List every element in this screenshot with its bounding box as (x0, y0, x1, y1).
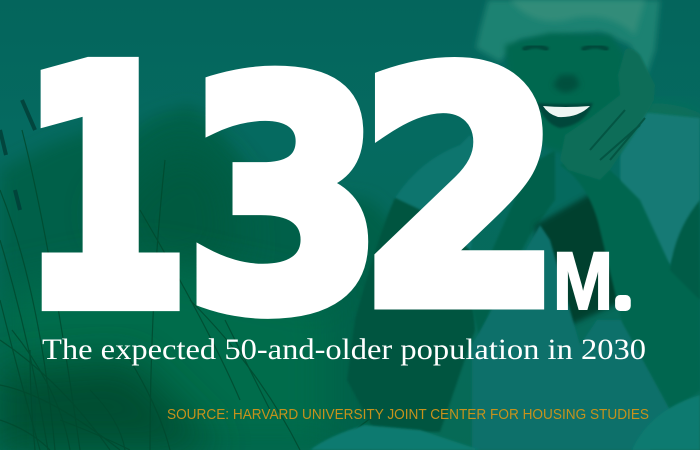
letter M: M (553, 236, 613, 327)
mouth (537, 103, 593, 128)
chest (535, 180, 625, 330)
teeth (543, 106, 590, 117)
right arm (560, 150, 700, 412)
big number 132 (19, 2, 563, 382)
digit 3: 3 (184, 16, 384, 382)
digit 1: 1 (19, 2, 190, 381)
face (505, 33, 625, 155)
left shoulder and sleeve (395, 135, 480, 260)
eyes (523, 46, 608, 50)
shirt centre (472, 225, 670, 450)
source line: SOURCE: HARVARD UNIVERSITY JOINT CENTER FOR HOUSING STUDIES (167, 406, 649, 423)
hair (476, 0, 660, 80)
upper left arm (347, 198, 475, 432)
shirt right (620, 112, 700, 265)
unit M. (553, 236, 629, 327)
left knee (310, 425, 480, 450)
forearm left (470, 150, 555, 340)
digit 2: 2 (358, 5, 563, 378)
hand (560, 48, 655, 180)
full stop: . (617, 271, 629, 315)
subtitle: The expected 50-and-older population in 2030 (42, 333, 646, 366)
right knee (632, 395, 700, 450)
nose (553, 75, 580, 92)
background photo: woman (310, 0, 700, 450)
background photo: grass blades (0, 100, 400, 450)
